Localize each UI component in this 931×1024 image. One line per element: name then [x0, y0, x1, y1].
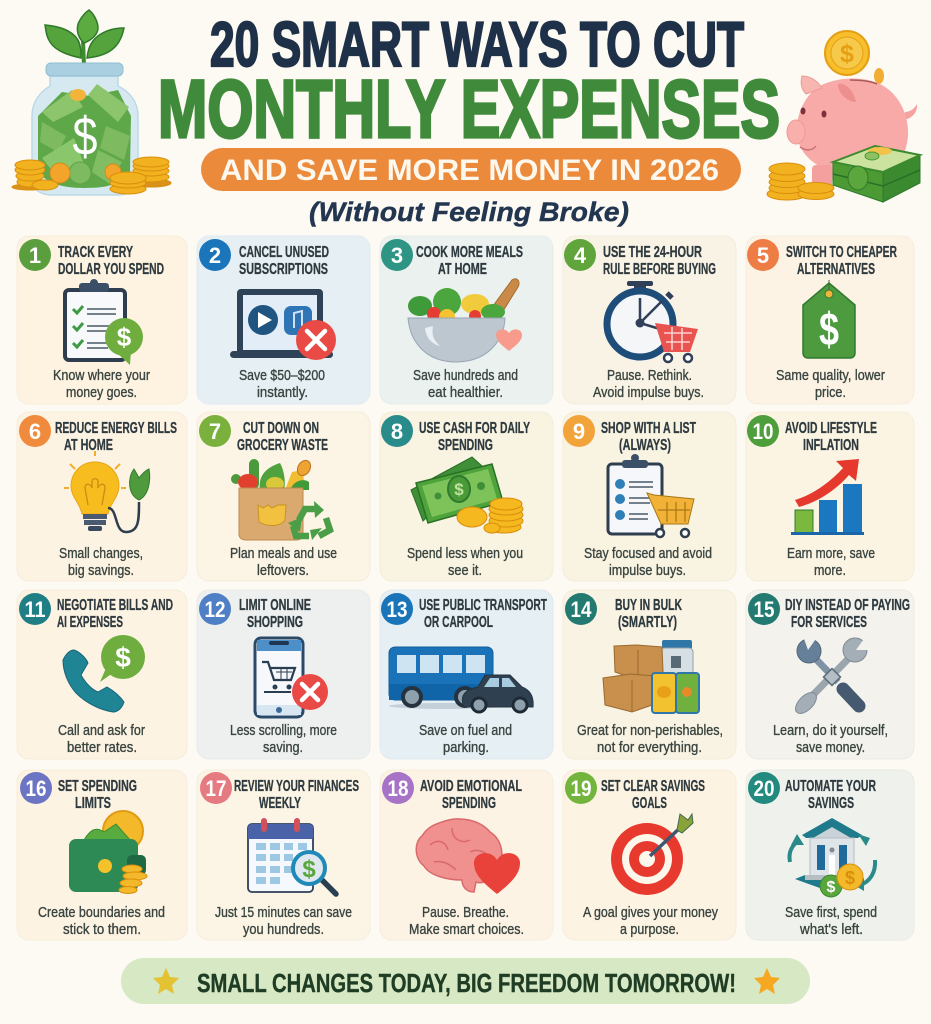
description: leftovers.: [257, 563, 309, 579]
description: [785, 905, 877, 938]
heading: LIMITS: [75, 795, 111, 812]
icon: calendar and magnifier: $: [302, 856, 316, 883]
heading: SPENDING: [442, 795, 496, 812]
coins right: [110, 157, 171, 194]
heading: [58, 778, 137, 812]
heading: SPENDING: [438, 437, 493, 454]
icon: phone and dollar bubble: [63, 635, 145, 712]
description: [583, 905, 719, 938]
icon: cash and coins: $: [454, 480, 464, 499]
badge 2: [199, 239, 231, 271]
panel: 5 cheaper alternatives: [746, 236, 914, 404]
heading: CUT DOWN ON: [243, 420, 319, 437]
panel: 20 automate savings: [746, 770, 914, 940]
footer banner: [121, 958, 810, 1004]
badge 15: [748, 593, 780, 625]
heading: LIMIT ONLINE: [239, 597, 311, 614]
panel: 13 public transport: [380, 590, 553, 759]
badge 8: 8: [391, 419, 403, 444]
pig body: [797, 78, 908, 184]
description: Plan meals and use: [230, 546, 337, 562]
icon: right star: [754, 968, 780, 994]
description: instantly.: [257, 385, 308, 401]
heading: REVIEW YOUR FINANCES: [234, 778, 359, 795]
tagline: (Without Feeling Broke): [309, 197, 629, 227]
description: money goes.: [66, 385, 137, 401]
badge 7: 7: [209, 419, 221, 444]
heading: [601, 778, 705, 812]
icon: bank with cycle arrows and coins: $: [827, 879, 836, 896]
badge 16: 16: [26, 776, 46, 801]
heading: USE PUBLIC TRANSPORT: [419, 597, 547, 614]
badge 6: [19, 415, 51, 447]
icon: plant leaves: [45, 10, 124, 66]
icon: bank with cycle arrows and coins: [789, 818, 875, 897]
description: better rates.: [67, 740, 137, 756]
badge 7: [199, 415, 231, 447]
description: saving.: [263, 740, 303, 756]
heading: REDUCE ENERGY BILLS: [55, 420, 177, 437]
badge 19: [565, 772, 597, 804]
heading: [237, 420, 328, 454]
icon: green price tag: $: [819, 303, 839, 355]
description: A goal gives your money: [583, 905, 719, 921]
description: Learn, do it yourself,: [773, 723, 888, 739]
description: Save $50–$200: [239, 368, 325, 384]
heading: [239, 244, 329, 278]
icon: brain and heart: [416, 819, 520, 894]
heading: SET CLEAR SAVINGS: [601, 778, 705, 795]
heading: SET SPENDING: [58, 778, 137, 795]
heading: RULE BEFORE BUYING: [603, 261, 716, 278]
badge 1: [19, 239, 51, 271]
banner text: SMALL CHANGES TODAY, BIG FREEDOM TOMORROW!: [197, 968, 736, 998]
pig back ear: [874, 68, 884, 84]
pig ear: [801, 76, 822, 94]
description: eat healthier.: [428, 385, 503, 401]
heading: GOALS: [632, 795, 667, 812]
badge 11: [19, 593, 51, 625]
pig smile: [800, 146, 816, 150]
badge 3: [381, 239, 413, 271]
badge 14: [565, 593, 597, 625]
heading: [420, 778, 522, 812]
description: what's left.: [799, 922, 863, 938]
icon: rising bar chart: [791, 459, 864, 535]
badge 13: 13: [386, 597, 408, 622]
description: Save on fuel and: [419, 723, 512, 739]
icon: light bulb with leaf plug: [64, 451, 150, 532]
icon: bus and car: [389, 647, 533, 712]
description: Less scrolling, more: [230, 723, 337, 739]
heading: USE CASH FOR DAILY: [419, 420, 530, 437]
heading: [419, 420, 530, 454]
heading: [419, 597, 547, 631]
description: [773, 723, 888, 756]
heading: DOLLAR YOU SPEND: [58, 261, 164, 278]
icon: left star: [153, 968, 179, 994]
description: Know where your: [53, 368, 150, 384]
description: [787, 546, 875, 579]
icon: phone and dollar bubble: $: [115, 642, 131, 673]
heading: (ALWAYS): [619, 437, 671, 454]
heading: ALTERNATIVES: [797, 261, 875, 278]
heading: AI EXPENSES: [57, 614, 123, 631]
description: [419, 723, 512, 756]
pig snout: [787, 120, 805, 144]
badge 5: [747, 239, 779, 271]
description: not for everything.: [597, 740, 702, 756]
panel: 3 cook at home: [380, 236, 553, 404]
heading: SAVINGS: [808, 795, 854, 812]
heading: WEEKLY: [259, 795, 301, 812]
badge 9: [563, 415, 595, 447]
badge 20: 20: [754, 776, 774, 801]
jar glass: [32, 76, 138, 195]
panel: 14 buy in bulk: [563, 590, 736, 759]
heading: [601, 420, 696, 454]
description: [230, 546, 337, 579]
heading: GROCERY WASTE: [237, 437, 328, 454]
description: [593, 368, 704, 401]
heading: [785, 597, 910, 631]
coin stack: [767, 163, 834, 200]
heading: FOR SERVICES: [791, 614, 867, 631]
description: [58, 723, 145, 756]
description: [413, 368, 518, 401]
panel: 2 cancel subscriptions: [197, 236, 370, 404]
icon: grocery bag and recycle symbol: [231, 458, 330, 540]
banknotes in jar: [38, 84, 131, 188]
header illustration: piggy bank: [767, 31, 920, 202]
description: [407, 546, 523, 579]
heading: USE THE 24-HOUR: [603, 244, 702, 261]
description: Spend less when you: [407, 546, 523, 562]
heading: COOK MORE MEALS: [416, 244, 523, 261]
badge 19: 19: [570, 776, 592, 801]
stacked banknotes: [833, 146, 920, 202]
dollar sign: $: [72, 107, 98, 167]
description: Great for non-perishables,: [577, 723, 723, 739]
description: price.: [815, 385, 846, 401]
icon: gold coin: [825, 31, 869, 75]
badge 17: 17: [206, 776, 226, 801]
icon: target and dart: [611, 814, 693, 895]
badge 5: 5: [757, 243, 769, 268]
icon: laptop with cancel mark: [230, 289, 336, 360]
icon: gold coin: $: [840, 40, 854, 68]
panel: 8 cash spending: [380, 412, 553, 581]
heading: [785, 778, 876, 812]
description: impulse buys.: [609, 563, 686, 579]
badge 8: [381, 415, 413, 447]
badge 15: 15: [754, 597, 774, 622]
panel: 9 shop with a list: [563, 412, 736, 581]
heading: AUTOMATE YOUR: [785, 778, 876, 795]
badge 12: 12: [204, 597, 226, 622]
pig leg: [812, 165, 832, 189]
icon: boxes, jar and cans: [603, 640, 699, 713]
icon: checklist clipboard with dollar bubble: $: [117, 322, 132, 352]
badge 6: 6: [29, 419, 41, 444]
badge 11: 11: [24, 597, 46, 622]
description: Save hundreds and: [413, 368, 518, 384]
description: Pause. Breathe.: [422, 905, 509, 921]
description: [53, 368, 150, 401]
description: [584, 546, 712, 579]
description: a purpose.: [620, 922, 679, 938]
badge 4: [564, 239, 596, 271]
panel: 12 online shopping: [197, 590, 370, 759]
heading: SUBSCRIPTIONS: [239, 261, 328, 278]
heading: OR CARPOOL: [424, 614, 493, 631]
subtitle pill: AND SAVE MORE MONEY IN 2026: [220, 154, 719, 187]
heading: [55, 420, 177, 454]
pig eyes: [800, 108, 826, 118]
panel: 19 savings goals: [563, 770, 736, 940]
heading: SHOPPING: [247, 614, 303, 631]
badge 3: 3: [391, 243, 403, 268]
badge 10: 10: [752, 419, 774, 444]
icon: list clipboard and orange cart: [608, 454, 694, 537]
description: Same quality, lower: [776, 368, 885, 384]
icon: stopwatch and red cart: [607, 281, 698, 362]
badge 20: [748, 772, 780, 804]
description: [215, 905, 352, 938]
badge 18: [382, 772, 414, 804]
heading: [234, 778, 359, 812]
heading: CANCEL UNUSED: [239, 244, 329, 261]
icon: salad bowl with heart: [408, 279, 522, 362]
description: Small changes,: [59, 546, 143, 562]
panel: 18 emotional spending: [380, 770, 553, 940]
description: Create boundaries and: [38, 905, 165, 921]
badge 9: 9: [573, 419, 585, 444]
icon: wrench and screwdriver: [792, 636, 871, 717]
icon: bank with cycle arrows and coins: $: [845, 868, 855, 888]
description: see it.: [448, 563, 482, 579]
description: [230, 723, 337, 756]
pig tail: [904, 104, 917, 120]
icon: green price tag: [803, 280, 855, 358]
description: Earn more, save: [787, 546, 875, 562]
panel: 11 negotiate bills: [17, 590, 187, 759]
badge 17: [200, 772, 232, 804]
coins left: [12, 160, 58, 190]
heading: AVOID LIFESTYLE: [785, 420, 877, 437]
description: Just 15 minutes can save: [215, 905, 352, 921]
description: [776, 368, 885, 401]
heading: [239, 597, 311, 631]
jar lid: [46, 63, 123, 76]
heading: [785, 420, 877, 454]
heading: [57, 597, 173, 631]
panel: 17 review weekly: [197, 770, 370, 940]
badge 16: [20, 772, 52, 804]
badge 10: [747, 415, 779, 447]
coin slot: [850, 80, 877, 84]
badge 14: 14: [570, 597, 592, 622]
description: [38, 905, 165, 938]
icon: calendar and magnifier: [248, 818, 336, 894]
heading: [615, 597, 682, 631]
heading: BUY IN BULK: [615, 597, 682, 614]
badge 2: 2: [209, 243, 221, 268]
panel: 6 energy bills: [17, 412, 187, 581]
heading: AVOID EMOTIONAL: [420, 778, 522, 795]
heading: AT HOME: [64, 437, 113, 454]
description: save money.: [796, 740, 865, 756]
description: Avoid impulse buys.: [593, 385, 704, 401]
heading: NEGOTIATE BILLS AND: [57, 597, 173, 614]
badge 12: [199, 593, 231, 625]
pig ear inner: [838, 84, 856, 102]
description: more.: [814, 563, 846, 579]
heading: [416, 244, 523, 278]
heading: (SMARTLY): [618, 614, 677, 631]
badge 1: 1: [29, 243, 41, 268]
heading: INFLATION: [803, 437, 859, 454]
description: big savings.: [68, 563, 134, 579]
icon: cash and coins: [411, 457, 523, 533]
heading: [786, 244, 897, 278]
description: Save first, spend: [785, 905, 877, 921]
heading: SHOP WITH A LIST: [601, 420, 696, 437]
heading: AT HOME: [438, 261, 487, 278]
description: [59, 546, 143, 579]
panel: 10 lifestyle inflation: [746, 412, 914, 581]
badge 13: [381, 593, 413, 625]
description: you hundreds.: [243, 922, 324, 938]
heading: TRACK EVERY: [58, 244, 133, 261]
description: Stay focused and avoid: [584, 546, 712, 562]
icon: wallet with cash and coins: [69, 811, 147, 894]
description: stick to them.: [63, 922, 141, 938]
panel: 16 spending limits: [17, 770, 187, 940]
description: Pause. Rethink.: [607, 368, 692, 384]
panel: 7 grocery waste: [197, 412, 370, 581]
icon: checklist clipboard with dollar bubble: [65, 279, 143, 365]
description: parking.: [443, 740, 489, 756]
badge 4: 4: [574, 243, 587, 268]
panel: 4 24-hour rule: [563, 236, 736, 404]
description: Make smart choices.: [409, 922, 524, 938]
description: Call and ask for: [58, 723, 145, 739]
icon: smartphone cart with cancel mark: [255, 638, 328, 717]
panel: 1 track every dollar: [17, 236, 187, 404]
description: [239, 368, 325, 401]
description: [577, 723, 723, 756]
heading: [58, 244, 164, 278]
panel: 15 do it yourself: [746, 590, 914, 759]
header illustration: money jar: [12, 10, 171, 195]
subtitle pill: [201, 148, 741, 191]
badge 18: 18: [388, 776, 408, 801]
heading: [603, 244, 716, 278]
description: [409, 905, 524, 938]
